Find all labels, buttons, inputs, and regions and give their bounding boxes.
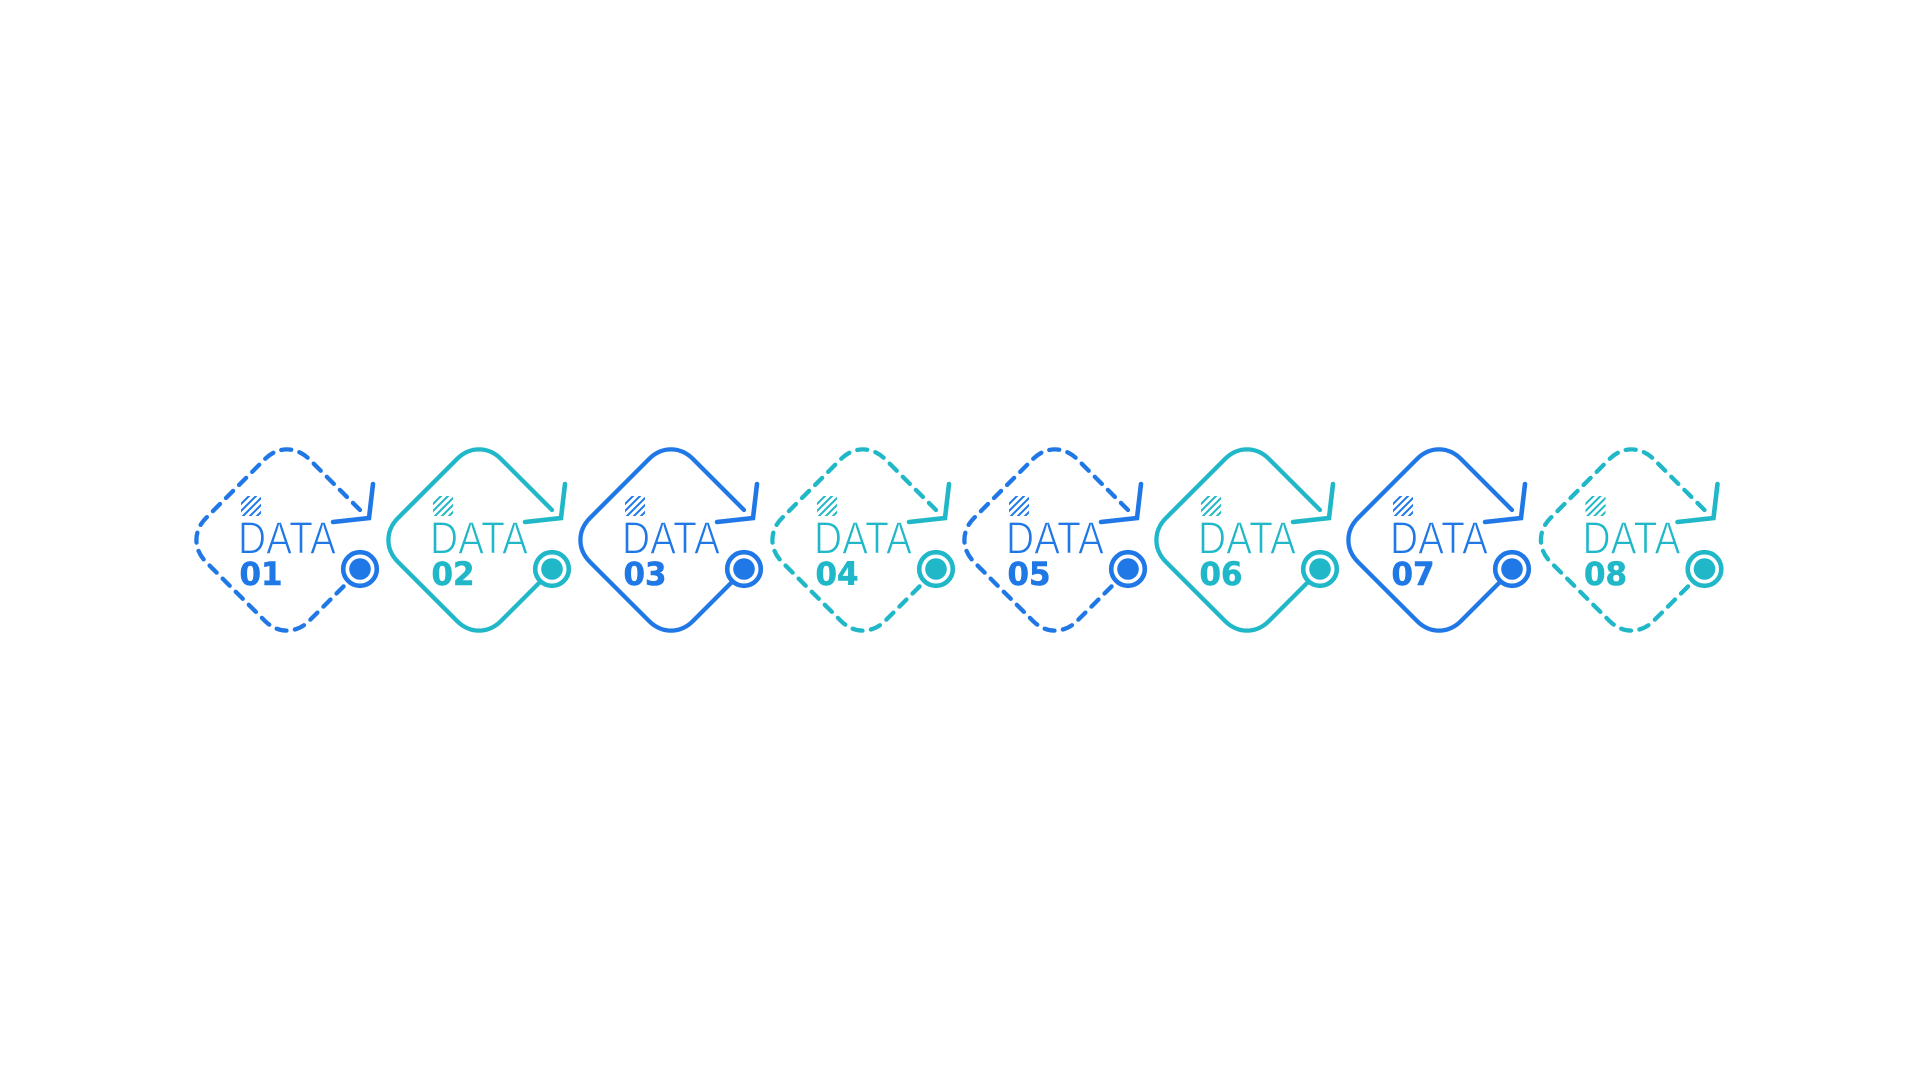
icon: node 02 bbox=[535, 552, 569, 586]
number 04: 04 bbox=[816, 555, 858, 593]
number 06: 06 bbox=[1200, 555, 1242, 593]
number 01: 01 bbox=[240, 555, 282, 593]
panel: data 02 bbox=[388, 449, 569, 631]
icon: node 01 bbox=[343, 552, 377, 586]
icon: node 04 bbox=[919, 552, 953, 586]
number 07: 07 bbox=[1392, 555, 1434, 593]
panel: data 03 bbox=[580, 449, 761, 631]
panel: data 06 bbox=[1156, 449, 1337, 631]
icon: arrow head 01 bbox=[333, 484, 373, 522]
icon: arrow head 07 bbox=[1485, 484, 1525, 522]
panel: data 08 bbox=[1541, 449, 1721, 631]
heading: DATA 03: DATA bbox=[622, 512, 720, 564]
icon: hatch 07 bbox=[1393, 496, 1413, 516]
number 08: 08 bbox=[1584, 555, 1627, 593]
diamond frame 01 bbox=[196, 449, 360, 631]
icon: hatch 02 bbox=[433, 496, 453, 516]
icon: hatch 08 bbox=[1586, 496, 1606, 516]
heading: DATA 05: DATA bbox=[1006, 512, 1104, 564]
heading: DATA 08: DATA bbox=[1582, 512, 1680, 564]
diamond frame 07 bbox=[1348, 449, 1512, 631]
icon: node 06 bbox=[1303, 552, 1337, 586]
icon: node 07 bbox=[1495, 552, 1529, 586]
diamond frame 04 bbox=[772, 449, 936, 631]
icon: node 08 bbox=[1688, 552, 1721, 586]
icon: hatch 05 bbox=[1009, 496, 1029, 516]
number 03: 03 bbox=[624, 555, 666, 593]
icon: node 05 bbox=[1111, 552, 1145, 586]
panel: data 04 bbox=[772, 449, 953, 631]
panel: data 05 bbox=[964, 449, 1145, 631]
icon: hatch 03 bbox=[625, 496, 645, 516]
panel: data 01 bbox=[196, 449, 377, 631]
icon: arrow head 05 bbox=[1101, 484, 1141, 522]
heading: DATA 06: DATA bbox=[1198, 512, 1296, 564]
icon: arrow head 04 bbox=[909, 484, 949, 522]
heading: DATA 01: DATA bbox=[238, 512, 336, 564]
icon: hatch 01 bbox=[241, 496, 261, 516]
icon: hatch 04 bbox=[817, 496, 837, 516]
icon: arrow head 02 bbox=[525, 484, 565, 522]
diamond frame 06 bbox=[1156, 449, 1320, 631]
icon: arrow head 03 bbox=[717, 484, 757, 522]
panel: data 07 bbox=[1348, 449, 1529, 631]
icon: node 03 bbox=[727, 552, 761, 586]
heading: DATA 04: DATA bbox=[814, 512, 912, 564]
heading: DATA 07: DATA bbox=[1390, 512, 1488, 564]
icon: arrow head 08 bbox=[1678, 484, 1718, 522]
heading: DATA 02: DATA bbox=[430, 512, 528, 564]
number 05: 05 bbox=[1008, 555, 1050, 593]
icon: arrow head 06 bbox=[1293, 484, 1333, 522]
diamond frame 03 bbox=[580, 449, 744, 631]
number 02: 02 bbox=[432, 555, 474, 593]
diamond frame 08 bbox=[1541, 449, 1704, 631]
icon: hatch 06 bbox=[1201, 496, 1221, 516]
diamond frame 05 bbox=[964, 449, 1128, 631]
diamond frame 02 bbox=[388, 449, 552, 631]
